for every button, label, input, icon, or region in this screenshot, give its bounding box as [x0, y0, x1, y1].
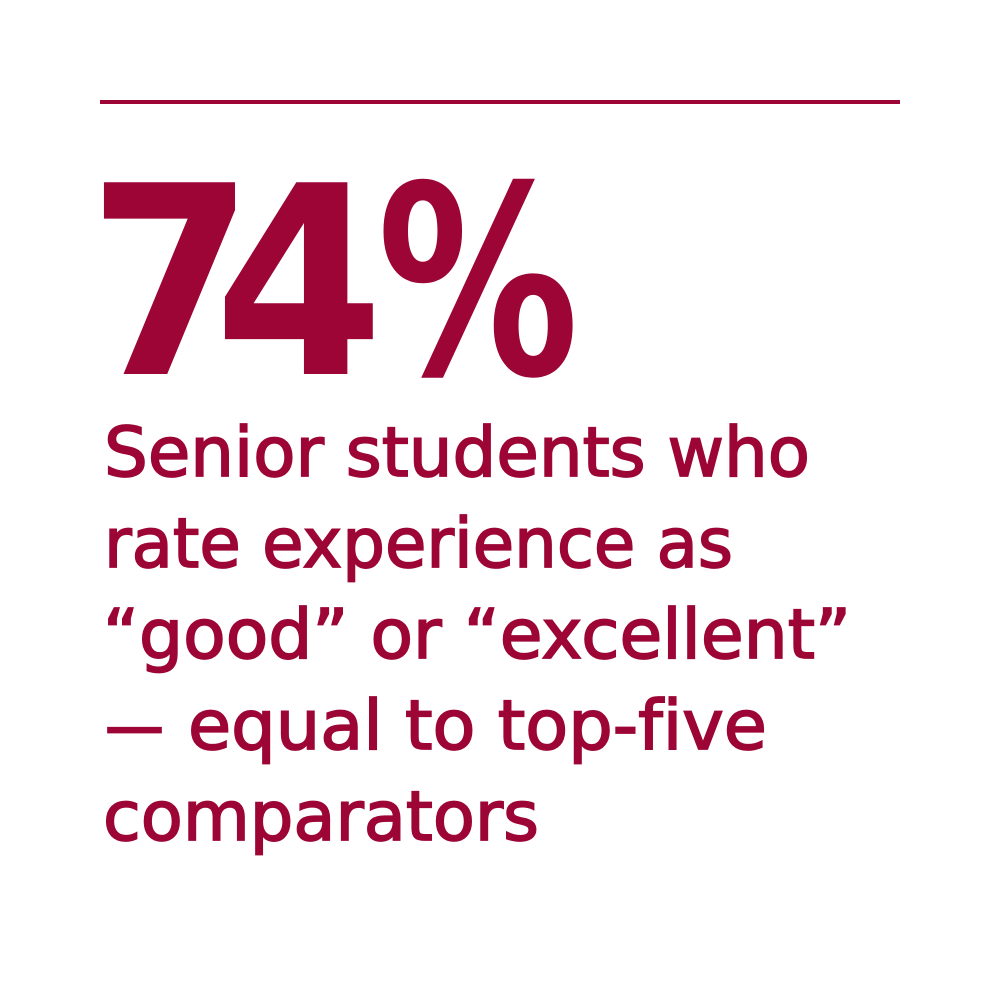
top rule: [100, 100, 900, 104]
big number: 74%: 7: [88, 131, 254, 437]
big number: 74%: [88, 131, 579, 437]
description text: rate experience as: [104, 504, 733, 584]
description text: [103, 413, 851, 857]
description text: “good” or “excellent”: [103, 595, 851, 675]
description text: Senior students who: [104, 413, 810, 493]
description text: comparators: [103, 777, 539, 857]
big number: 74%: %: [377, 131, 579, 437]
big number: 74%: 4: [214, 131, 384, 437]
description text: —: [105, 686, 164, 766]
description text: equal to top-five: [188, 686, 767, 766]
